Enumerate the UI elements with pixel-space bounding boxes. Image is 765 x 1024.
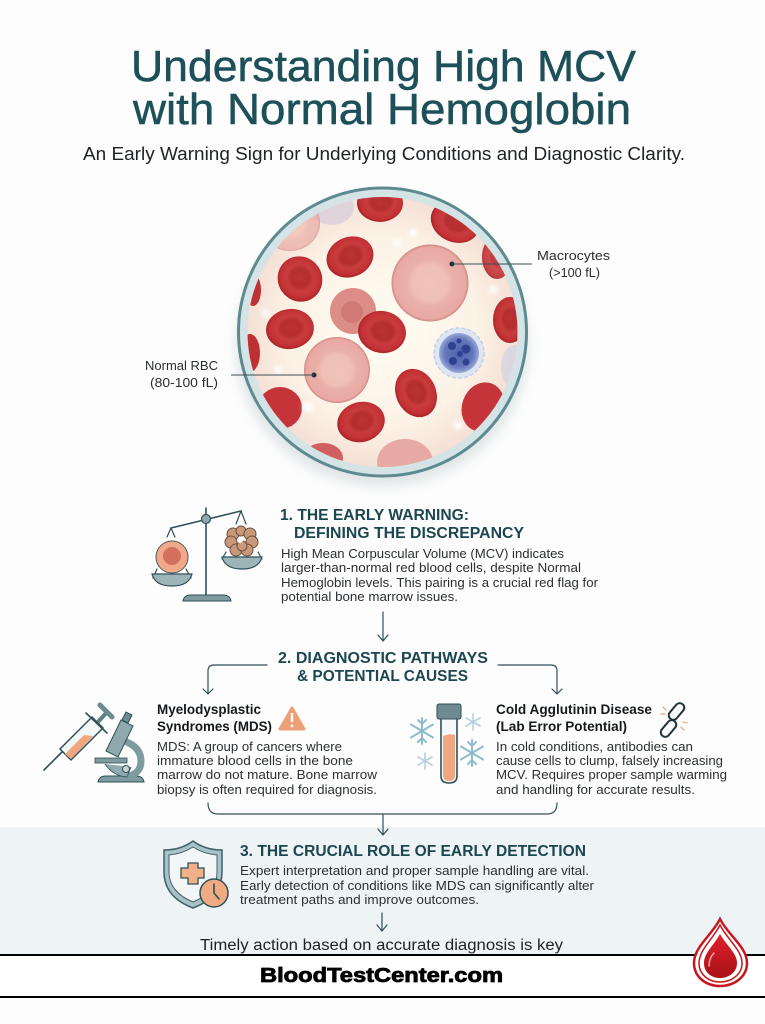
conclusion line: Timely action based on accurate diagnosis is key — [200, 937, 563, 954]
section 1 heading: 1. THE EARLY WARNING: — [280, 507, 469, 524]
section 3 heading: 3. THE CRUCIAL ROLE OF EARLY DETECTION — [240, 843, 586, 860]
MDS heading: Myelodysplastic — [157, 702, 261, 717]
arrow: section 3 to conclusion — [377, 913, 387, 931]
normal red cells — [266, 236, 437, 442]
section 3 text: Early detection of conditions like MDS can significantly alter — [240, 878, 595, 893]
white blood cell — [434, 328, 484, 378]
cold agglutinin text: cause cells to clump, falsely increasing — [496, 753, 723, 768]
arrow: section 1 to section 2 — [378, 612, 388, 641]
section 2 heading: 2. DIAGNOSTIC PATHWAYS — [278, 650, 488, 667]
cold agglutinin text: and handling for accurate results. — [496, 782, 695, 797]
MDS text: marrow do not mature. Bone marrow — [157, 767, 378, 782]
section 1 text: potential bone marrow issues. — [281, 589, 458, 604]
section 1 text: High Mean Corpuscular Volume (MCV) indicates — [281, 546, 564, 561]
microscope view of blood cells — [236, 184, 529, 486]
cold agglutinin text: MCV. Requires proper sample warming — [496, 767, 727, 782]
icon: broken chain link — [659, 701, 687, 739]
cold agglutinin heading: Cold Agglutinin Disease — [496, 702, 652, 717]
section 1 heading: DEFINING THE DISCREPANCY — [294, 525, 525, 542]
normal RBC pale cell — [304, 337, 370, 403]
footer brand name: BloodTestCenter.com — [260, 965, 503, 987]
MDS text: immature blood cells in the bone — [157, 753, 353, 768]
macrocyte — [392, 244, 468, 322]
faded background cells — [260, 189, 529, 389]
section 2 heading: & POTENTIAL CAUSES — [297, 668, 468, 685]
callout: macrocytes: (>100 fL) — [549, 265, 600, 280]
section 1 text: Hemoglobin levels. This pairing is a crucial red flag for — [281, 575, 599, 590]
MDS text — [157, 739, 378, 797]
MDS text: biopsy is often required for diagnosis. — [157, 782, 377, 797]
icon: warning triangle — [280, 708, 304, 729]
cold agglutinin text — [496, 739, 727, 797]
title: with Normal Hemoglobin — [132, 85, 631, 134]
section 1 text: larger-than-normal red blood cells, despite Normal — [281, 560, 581, 575]
cold agglutinin heading: (Lab Error Potential) — [496, 719, 627, 734]
callout: normal RBC: (80-100 fL) — [150, 375, 218, 390]
arrow: branch to cold agglutinin — [498, 665, 562, 694]
callout: normal RBC — [145, 358, 316, 390]
cold agglutinin heading — [496, 702, 652, 734]
callout: macrocytes: Macrocytes — [537, 248, 611, 263]
section 1 text — [281, 546, 599, 604]
arrow: branch to MDS — [203, 665, 267, 694]
panel: early detection band — [0, 827, 765, 954]
icon: blood drop logo — [694, 919, 747, 986]
section 3 text: Expert interpretation and proper sample handling are vital. — [240, 863, 589, 878]
plasma highlights — [262, 229, 497, 429]
subtitle: An Early Warning Sign for Underlying Conditions and Diagnostic Clarity. — [83, 144, 685, 164]
icon: syringe — [44, 705, 112, 770]
edge red cells — [248, 197, 518, 467]
section 3 text: treatment paths and improve outcomes. — [240, 892, 479, 907]
MDS heading: Syndromes (MDS) — [157, 719, 272, 734]
section 2 heading — [278, 650, 488, 685]
section 3 text — [240, 863, 595, 907]
MDS text: MDS: A group of cancers where — [157, 739, 342, 754]
icon: balance scale — [152, 508, 262, 601]
cold agglutinin text: In cold conditions, antibodies can — [496, 739, 693, 754]
icon: shield with cross and clock — [164, 841, 228, 908]
callout: normal RBC: Normal RBC — [145, 358, 218, 373]
MDS heading — [157, 702, 272, 734]
callout: macrocytes — [450, 248, 611, 280]
section 1 heading — [280, 507, 525, 542]
title — [131, 42, 637, 134]
footer band — [0, 954, 765, 998]
arrow: merge pathways to section 3 — [208, 803, 557, 835]
title: Understanding High MCV — [131, 42, 637, 91]
icon: test tube with snowflakes — [411, 704, 483, 783]
icon: microscope — [95, 712, 144, 782]
